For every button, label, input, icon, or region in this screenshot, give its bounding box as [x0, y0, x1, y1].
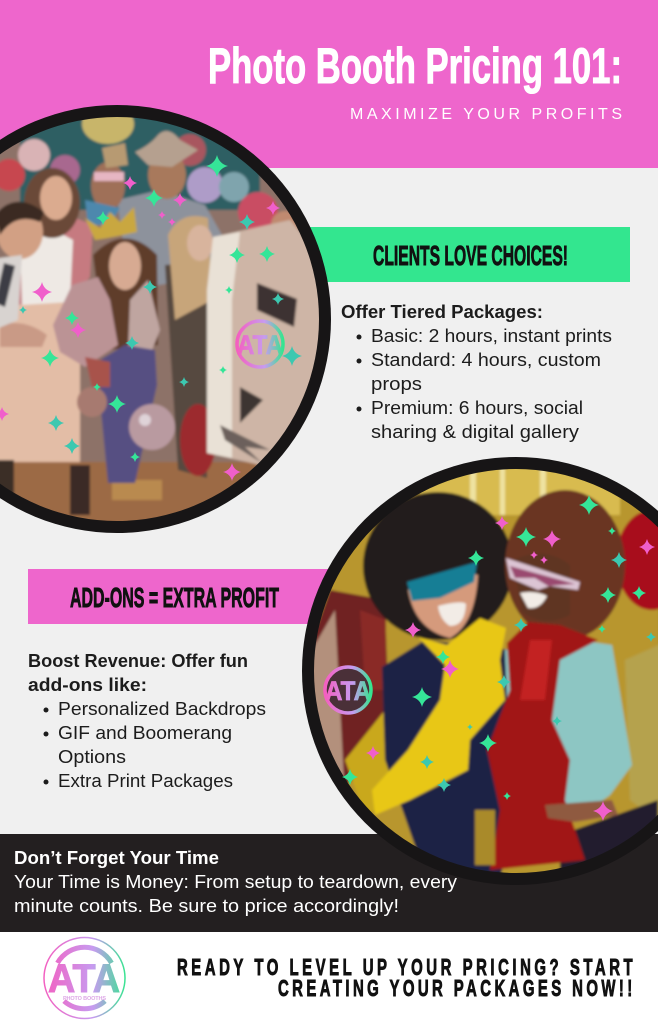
navy top: [382, 640, 520, 880]
icon: ATA Photo Booths logo: PHOTO BOOTHS: [63, 996, 106, 1002]
time panel: Don’t Forget Your Time: [14, 848, 219, 868]
balloons: [129, 404, 175, 450]
text block: tiered packages: Standard: 4 hours, custom: [371, 350, 601, 370]
header band: [0, 0, 658, 168]
text block: tiered packages: Basic: 2 hours, instant prints: [371, 326, 612, 346]
call to action: READY TO LEVEL UP YOUR PRICING? START: [177, 955, 633, 981]
booth: [224, 219, 319, 466]
footer band: CREATING YOUR PACKAGES NOW!!: [278, 976, 632, 1002]
sparkles on party group: [0, 155, 302, 481]
afro brown: [505, 490, 625, 640]
sparkles on friends: [342, 495, 656, 821]
text block: tiered packages: Offer Tiered Packages:: [341, 302, 543, 322]
icon: small logo on friends: [325, 667, 371, 713]
man left: [0, 217, 45, 260]
left boa lower: [344, 711, 389, 812]
text block: add-ons list: [28, 651, 266, 791]
text block: add-ons list: Boost Revenue: Offer fun: [28, 651, 248, 671]
footer band: [0, 932, 658, 1024]
banner: clients love choices: [300, 227, 630, 282]
skirt: [0, 300, 80, 470]
subtitle: MAXIMIZE YOUR PROFITS: [350, 106, 622, 123]
afro black: [363, 492, 513, 640]
banner: add-ons: [28, 569, 338, 624]
hand: [545, 800, 618, 822]
woman top and cardigan: [17, 213, 93, 305]
icon: small logo on booth: ATA: [237, 330, 283, 360]
time panel: minute counts. Be sure to price accordingly!: [14, 896, 399, 916]
text block: tiered packages: props: [371, 374, 422, 394]
icon: small logo on friends: ATA: [325, 676, 371, 706]
yellow boa: [372, 618, 506, 815]
heart glasses man: [91, 162, 125, 210]
blonde woman and dress: [165, 262, 207, 478]
centre woman: [93, 238, 158, 350]
photo circle: friends with feather boas: [300, 457, 658, 890]
text block: add-ons list: GIF and Boomerang: [58, 723, 232, 743]
icon: ATA Photo Booths logo: ATA: [48, 957, 120, 1001]
photo circle: party group at booth: [0, 104, 331, 533]
text block: tiered packages: Premium: 6 hours, social: [371, 398, 583, 418]
red boa: [487, 622, 598, 870]
text block: tiered packages: [341, 302, 612, 442]
text block: add-ons list: Personalized Backdrops: [58, 699, 266, 719]
text block: add-ons list: add-ons like:: [28, 675, 147, 695]
face right: [518, 555, 570, 620]
banner: add-ons: ADD-ONS = EXTRA PROFIT: [70, 582, 279, 613]
red afro right: [616, 510, 658, 610]
icon: small logo on booth: [237, 321, 283, 367]
man with hat: [117, 190, 222, 290]
text block: tiered packages: sharing & digital gallery: [371, 422, 579, 442]
time panel: Your Time is Money: From setup to teardown, every: [14, 872, 457, 892]
text block: add-ons list: Options: [58, 747, 126, 767]
text block: add-ons list: Extra Print Packages: [58, 771, 233, 791]
time panel: [0, 834, 658, 932]
shirt: [505, 640, 632, 820]
face left: [408, 572, 478, 638]
floor: [12, 460, 257, 521]
gold floor fringe: [475, 810, 495, 865]
right shoulder gold: [625, 640, 658, 830]
icon: ATA Photo Booths logo: [44, 938, 125, 1018]
